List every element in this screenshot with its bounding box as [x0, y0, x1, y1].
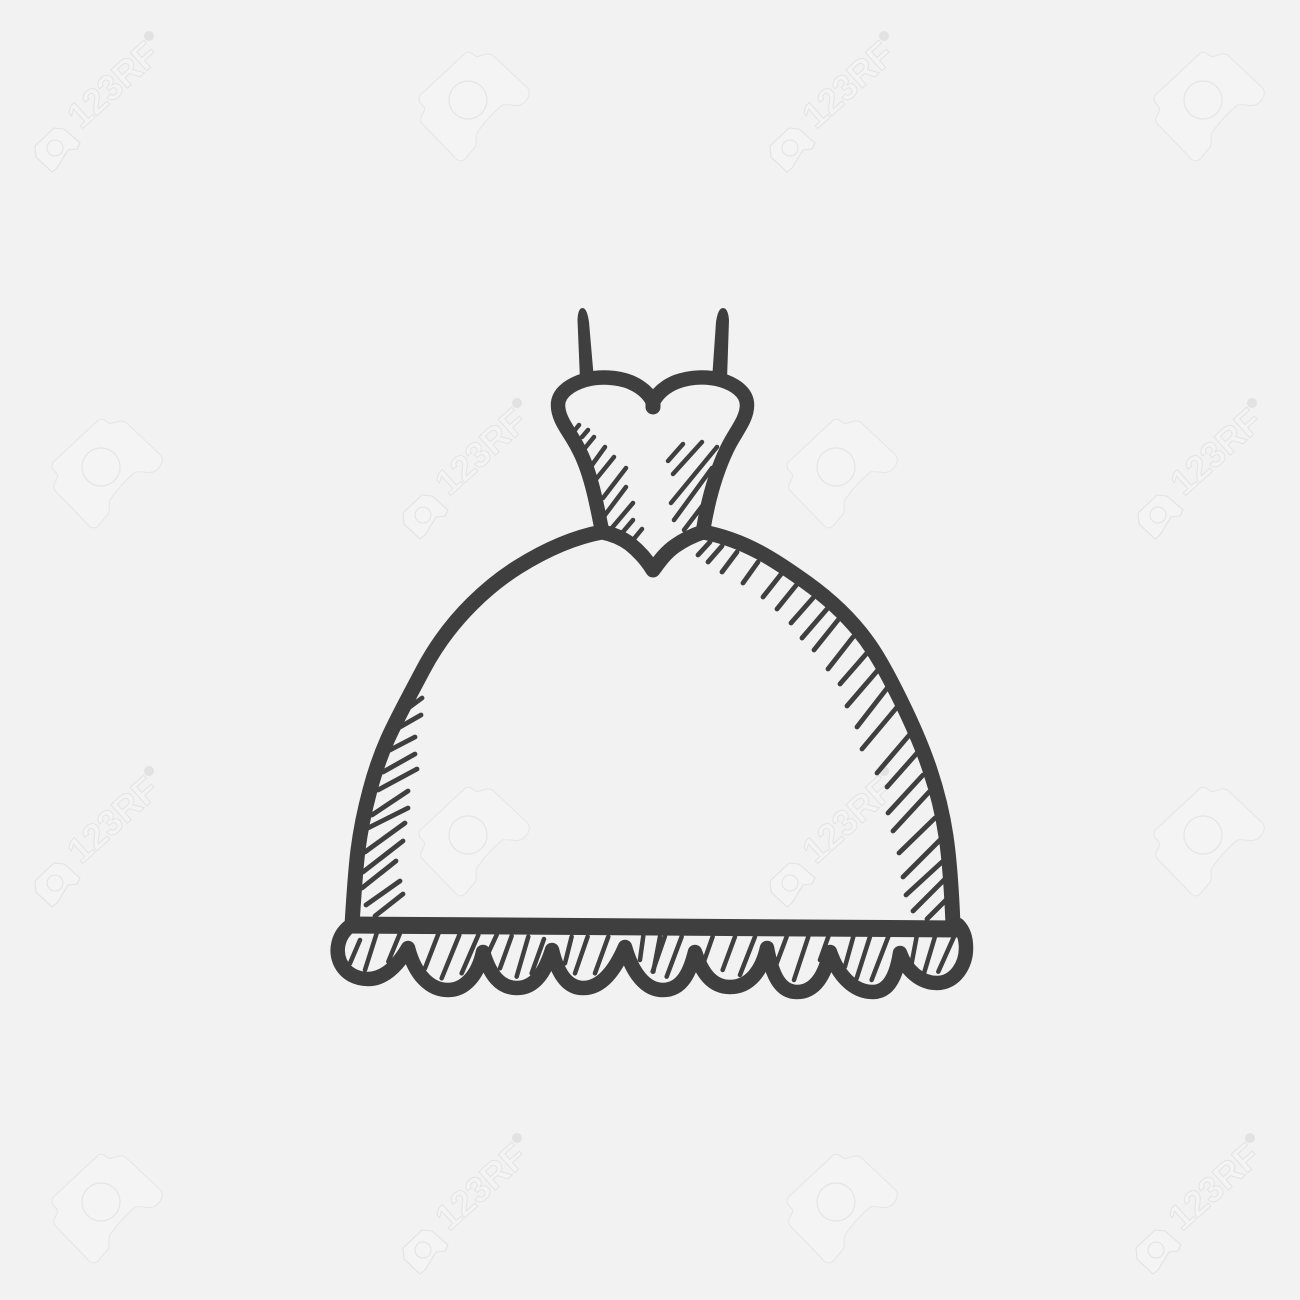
watermark: 123RF logo: [1136, 1133, 1268, 1274]
ruffle hatching right: [653, 936, 954, 980]
watermark: 123RF logo: [770, 31, 902, 172]
waistline V: [602, 532, 703, 570]
hem band: [350, 925, 960, 929]
watermark: 123RF logo: [35, 31, 167, 172]
watermark: large egg icon: [1157, 790, 1262, 893]
ruffle hatching left: [350, 933, 660, 978]
left skirt hatching: [362, 698, 422, 916]
watermark: 123RF logo: [35, 766, 167, 907]
bodice outline: [558, 378, 747, 531]
bodice hatching: [575, 425, 717, 540]
right side of skirt: [703, 532, 953, 925]
watermark: 123RF logo: 123RF: [59, 33, 167, 136]
watermark: 123RF logo: 123RF: [59, 768, 167, 871]
watermark: 123RF logo: 123RF: [794, 33, 902, 136]
watermark: 123RF logo: 123RF: [794, 768, 902, 871]
icon: wedding dress sketch: [338, 308, 966, 992]
right strap: [712, 308, 729, 380]
scalloped ruffle: [338, 925, 966, 992]
watermark: large egg icon: [422, 55, 527, 158]
watermark: 123RF logo: 123RF: [1160, 1135, 1268, 1238]
watermark: large egg icon: [790, 1157, 895, 1260]
watermark: 123RF logo: 123RF: [427, 400, 535, 503]
watermark: large egg icon: [422, 790, 527, 893]
left side of skirt: [352, 532, 602, 925]
watermark: large egg icon: [55, 422, 160, 525]
watermark: 123RF logo: [1138, 398, 1270, 539]
watermark: 123RF logo: 123RF: [427, 1135, 535, 1238]
watermark: 123RF logo: [403, 398, 535, 539]
left strap: [578, 308, 594, 380]
watermark: 123RF logo: 123RF: [1162, 400, 1270, 503]
watermark: large egg icon: [55, 1157, 160, 1260]
right skirt hatching: [698, 542, 946, 919]
watermark: large egg icon: [790, 422, 895, 525]
watermark: 123RF logo: [770, 766, 902, 907]
watermark: large egg icon: [1157, 55, 1262, 158]
watermark: 123RF logo: [403, 1133, 535, 1274]
neckline notch: [646, 397, 660, 407]
